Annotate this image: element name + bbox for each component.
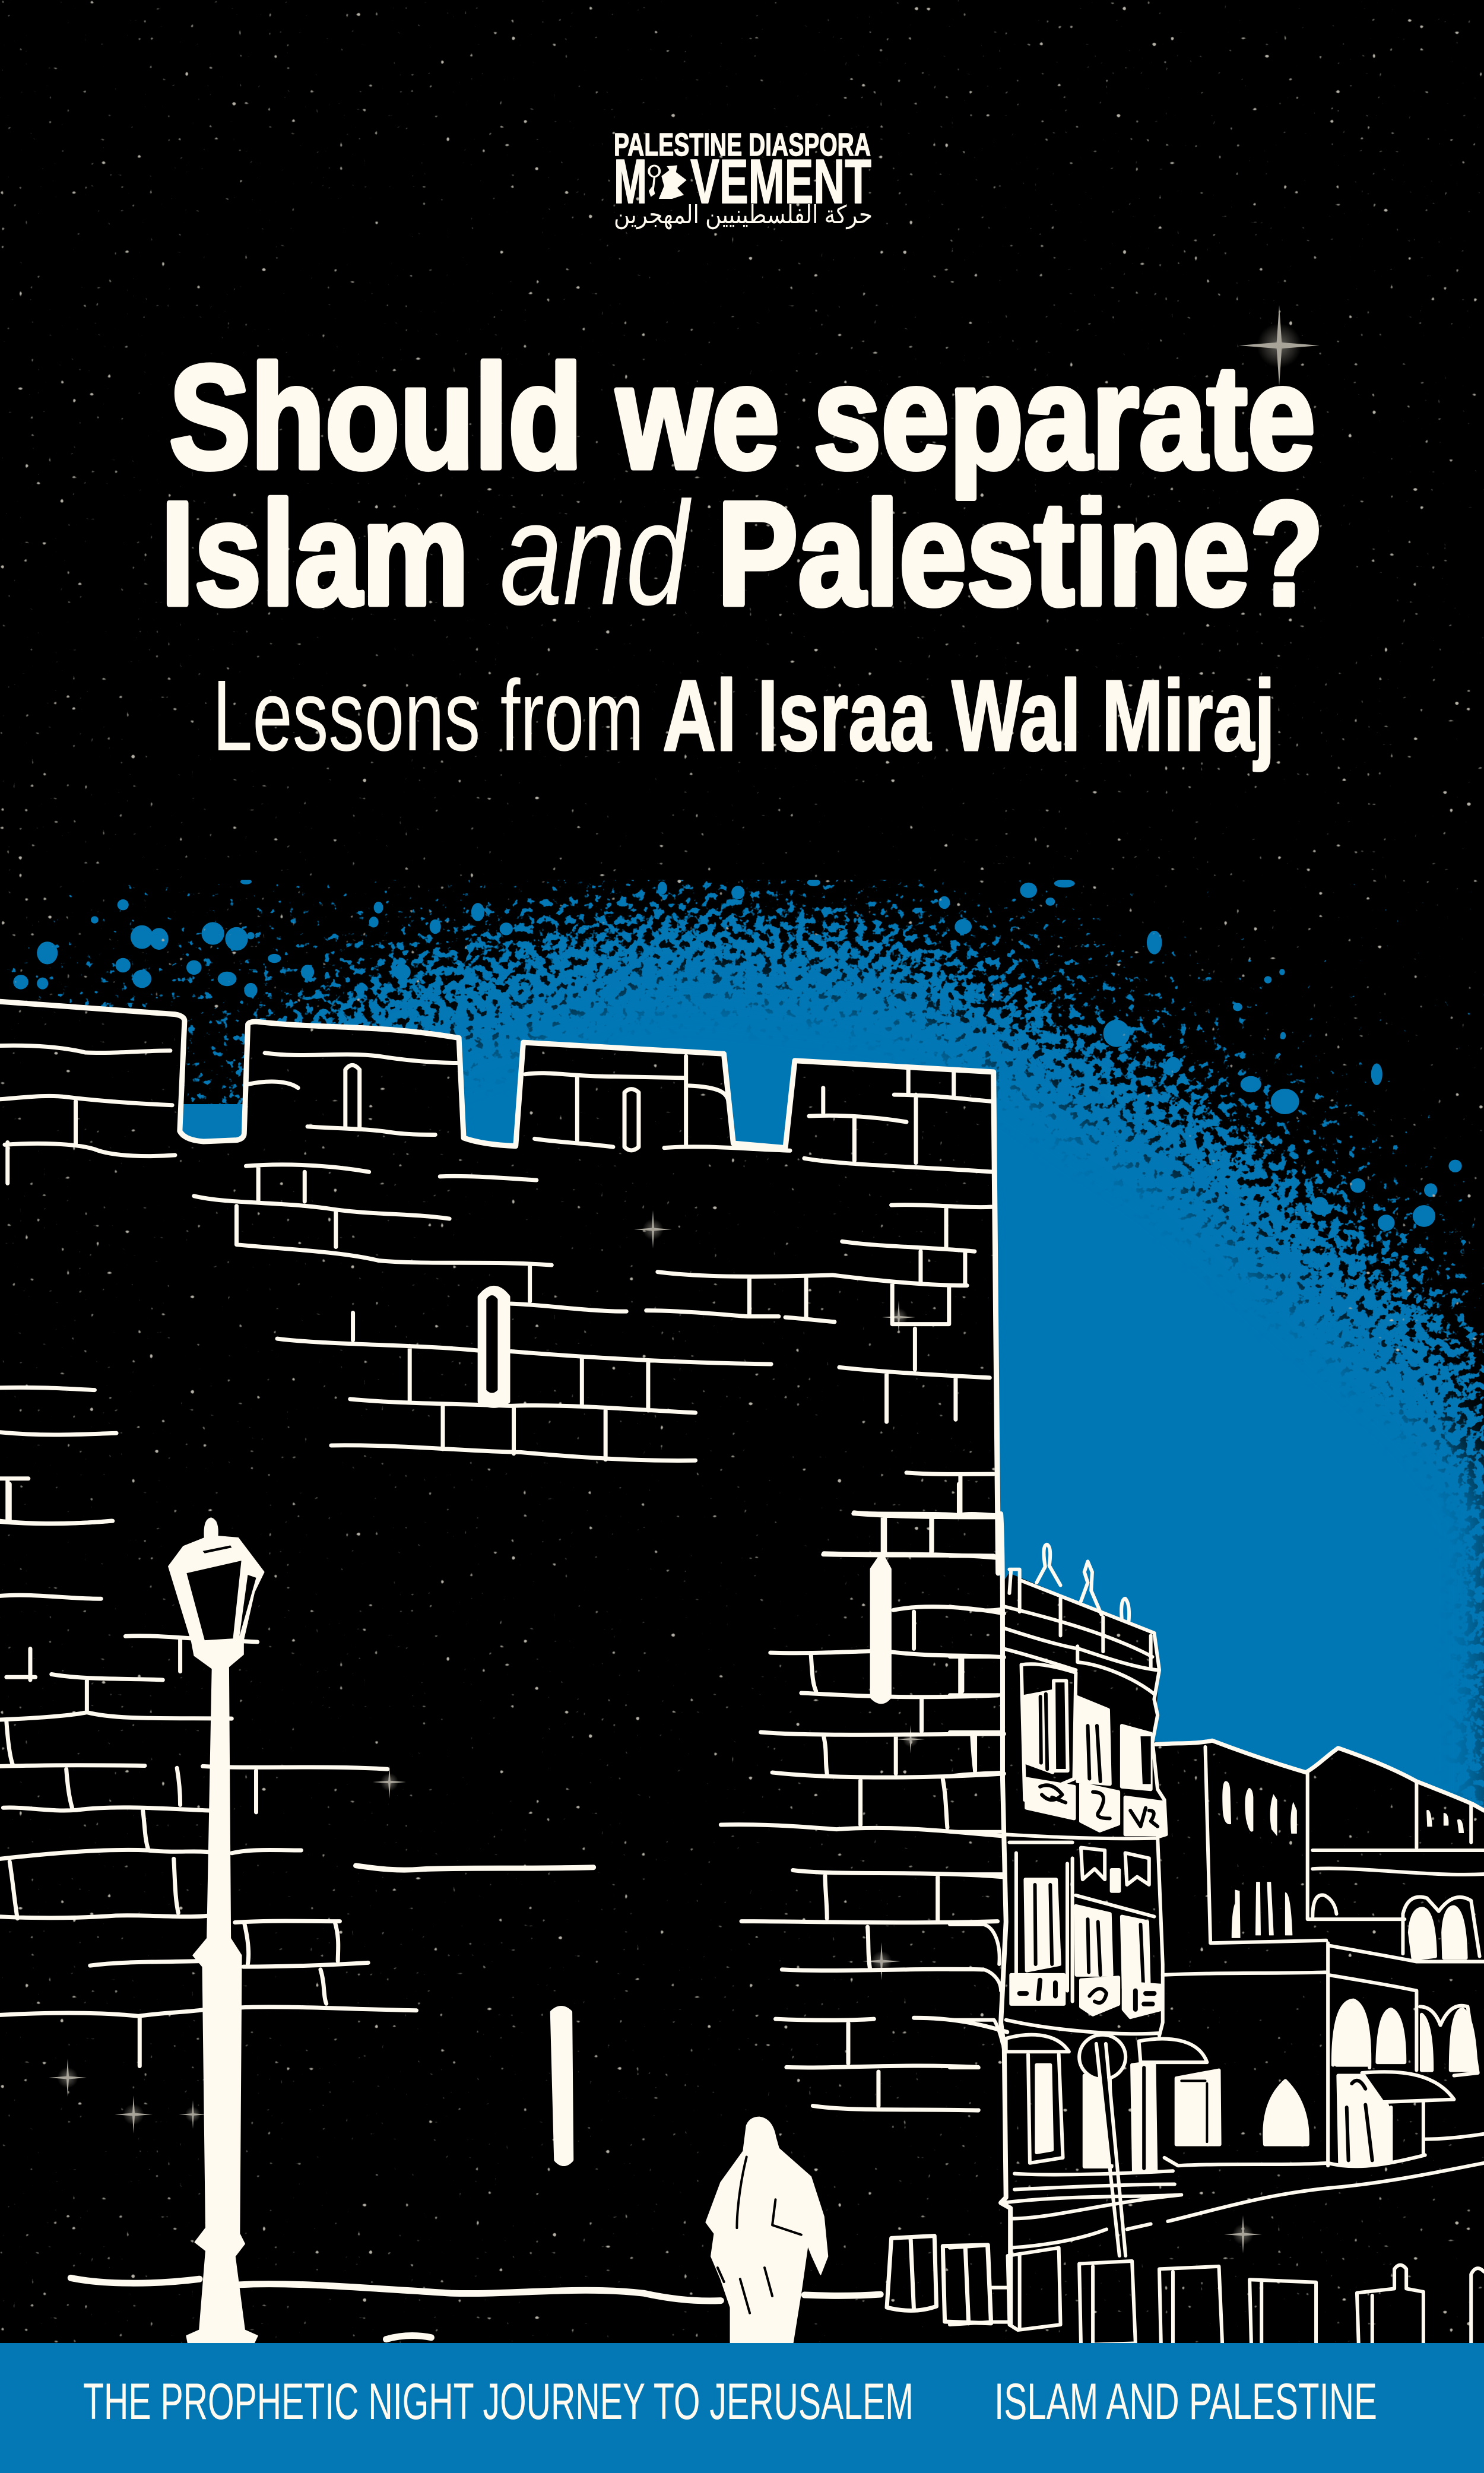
- paint droplets: [13, 879, 1462, 1231]
- bollards row: [950, 2245, 1484, 2345]
- headline: and: [500, 471, 692, 636]
- footer text: series name: THE PROPHETIC NIGHT JOURNEY TO JERUSALEM: [83, 2373, 914, 2430]
- bollards: [887, 2236, 991, 2323]
- organisation logo: VEMENT: [690, 147, 871, 217]
- capsule windows: [1223, 1781, 1464, 1938]
- arrow slits: [345, 1065, 639, 1150]
- icon: key and map of Palestine: [649, 165, 687, 199]
- old city wall silhouette: [0, 1001, 1484, 2343]
- headline: Islam: [161, 471, 469, 636]
- Arabic name: حركة الفلسطينيين المهجرين: [614, 201, 873, 230]
- headline: [161, 334, 1324, 636]
- lower wall brickwork: [0, 1484, 1007, 2342]
- facade statues and roofline: [1009, 1545, 1129, 1622]
- left brick lines: [0, 1484, 416, 2066]
- subtitle: [213, 660, 1275, 772]
- ground line: [71, 2278, 880, 2339]
- footer bar: [0, 2343, 1484, 2473]
- right brick lines: [721, 1484, 1007, 2110]
- upper wall brickwork and battlements: [0, 1001, 998, 1573]
- blue patch in first merlon gap: [183, 1104, 242, 1139]
- shop door and awning: [1338, 2075, 1391, 2163]
- organisation logo: M: [614, 147, 647, 217]
- facade middle windows: [1016, 1848, 1154, 2001]
- subtitle: Lessons from: [213, 660, 644, 772]
- sparkle stars: [49, 305, 1320, 2253]
- right building lines: [1156, 1740, 1484, 1811]
- facade ground floor: [1006, 2035, 1069, 2052]
- tower edge bricks: [1001, 1514, 1010, 2325]
- battlement outline: [0, 1001, 998, 1573]
- wall slit: [552, 2008, 572, 2164]
- street and base lines: [1003, 2163, 1484, 2248]
- headline: Palestine?: [717, 471, 1324, 636]
- blue spray paint sky: [7, 880, 1484, 1808]
- arched windows: [1264, 1907, 1476, 2145]
- buildings beside the wall: [950, 1514, 1484, 2345]
- brick lines: [0, 1045, 994, 1183]
- facade upper windows: [1022, 1664, 1076, 1800]
- organisation logo: PALESTINE DIASPORA: [614, 127, 871, 163]
- walking figure: [706, 2117, 827, 2342]
- facade ornaments: [1026, 1778, 1074, 1818]
- street lamp: [169, 1518, 264, 2342]
- organisation logo: [614, 127, 873, 230]
- subtitle: Al Israa Wal Miraj: [662, 660, 1275, 772]
